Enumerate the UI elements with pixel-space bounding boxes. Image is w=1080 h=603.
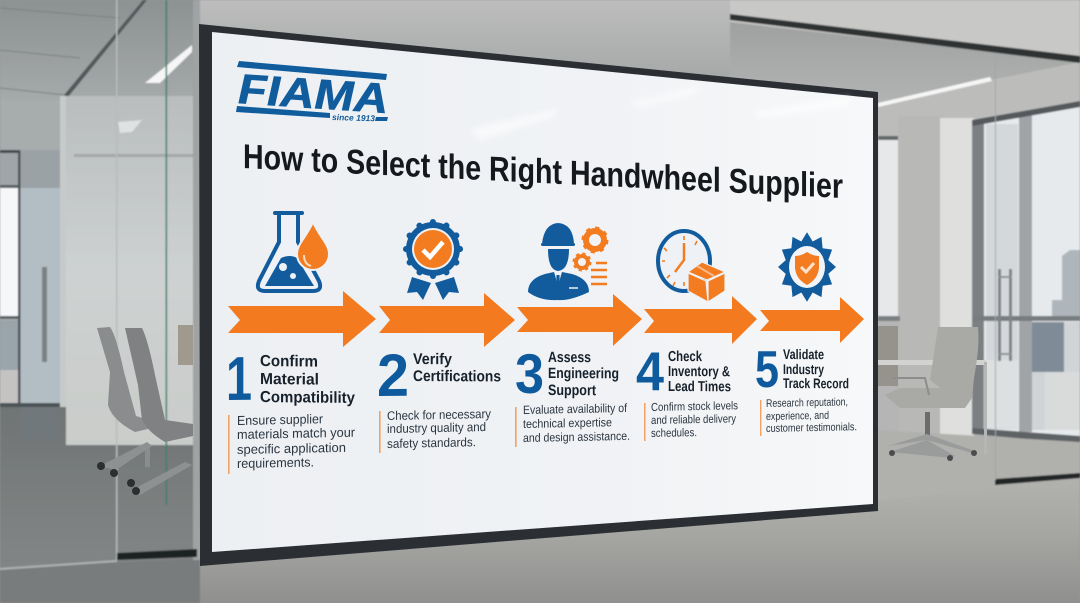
step 2: Verify xyxy=(413,351,452,368)
step 5: customer testimonials. xyxy=(766,421,857,435)
step 1: requirements. xyxy=(237,454,314,471)
arrow 4 xyxy=(644,296,757,344)
step 2: 2 xyxy=(377,342,409,409)
step 2 xyxy=(377,342,501,453)
step 4: and reliable delivery xyxy=(651,413,736,427)
step 5: 5 xyxy=(755,341,779,399)
step 1: Compatibility xyxy=(260,389,355,407)
step 4: Inventory & xyxy=(668,364,730,380)
icon: award ribbon xyxy=(406,222,460,300)
step 3: technical expertise xyxy=(523,415,612,431)
step 1: specific application xyxy=(237,440,346,457)
step 2: industry quality and xyxy=(387,420,486,436)
step 5: experience, and xyxy=(766,410,829,423)
screen glare xyxy=(470,85,850,140)
arrow 2 xyxy=(379,293,515,347)
step 5: Track Record xyxy=(783,375,849,391)
arrow 3 xyxy=(517,294,642,346)
step 5: Industry xyxy=(783,361,824,377)
step 3 xyxy=(515,342,630,447)
step 1: materials match your xyxy=(237,425,356,442)
title: How to Select the Right Handwheel Supplier xyxy=(243,138,843,206)
step 2: Certifications xyxy=(413,368,501,385)
logo: FIAMA: since 1913 xyxy=(332,112,375,123)
step 3: 3 xyxy=(515,342,544,405)
step 5: Validate xyxy=(783,346,824,362)
step 1 xyxy=(226,345,356,474)
icon: shield badge xyxy=(778,232,836,302)
step 2: Check for necessary xyxy=(387,407,492,423)
logo: FIAMA: FIAMA xyxy=(238,65,388,122)
right chairs and table xyxy=(878,326,987,461)
left chairs xyxy=(97,325,193,495)
step 1: Ensure supplier xyxy=(237,411,324,428)
step 4: Check xyxy=(668,349,703,365)
step 5: Research reputation, xyxy=(766,396,848,410)
step 4: schedules. xyxy=(651,427,697,440)
display board frame xyxy=(199,24,878,566)
step 4: 4 xyxy=(636,340,664,402)
step 2: safety standards. xyxy=(387,435,476,451)
step 1: Confirm xyxy=(260,353,318,371)
step 3: Evaluate availability of xyxy=(523,401,628,417)
display board screen xyxy=(212,32,873,552)
icon: clock and box xyxy=(658,231,725,302)
step 1: 1 xyxy=(226,345,252,414)
step 3: Assess xyxy=(548,349,591,366)
step 1: Material xyxy=(260,371,319,389)
icon: flask with drop xyxy=(258,213,329,291)
step 3: and design assistance. xyxy=(523,429,630,445)
icon: engineer with gears xyxy=(528,223,607,300)
step 3: Support xyxy=(548,382,596,399)
step 4: Confirm stock levels xyxy=(651,400,738,414)
arrow 1 xyxy=(228,291,376,347)
step 5 xyxy=(755,341,857,436)
arrow 5 xyxy=(760,297,864,343)
step 3: Engineering xyxy=(548,365,619,382)
step 4: Lead Times xyxy=(668,379,731,395)
step 4 xyxy=(636,340,738,441)
